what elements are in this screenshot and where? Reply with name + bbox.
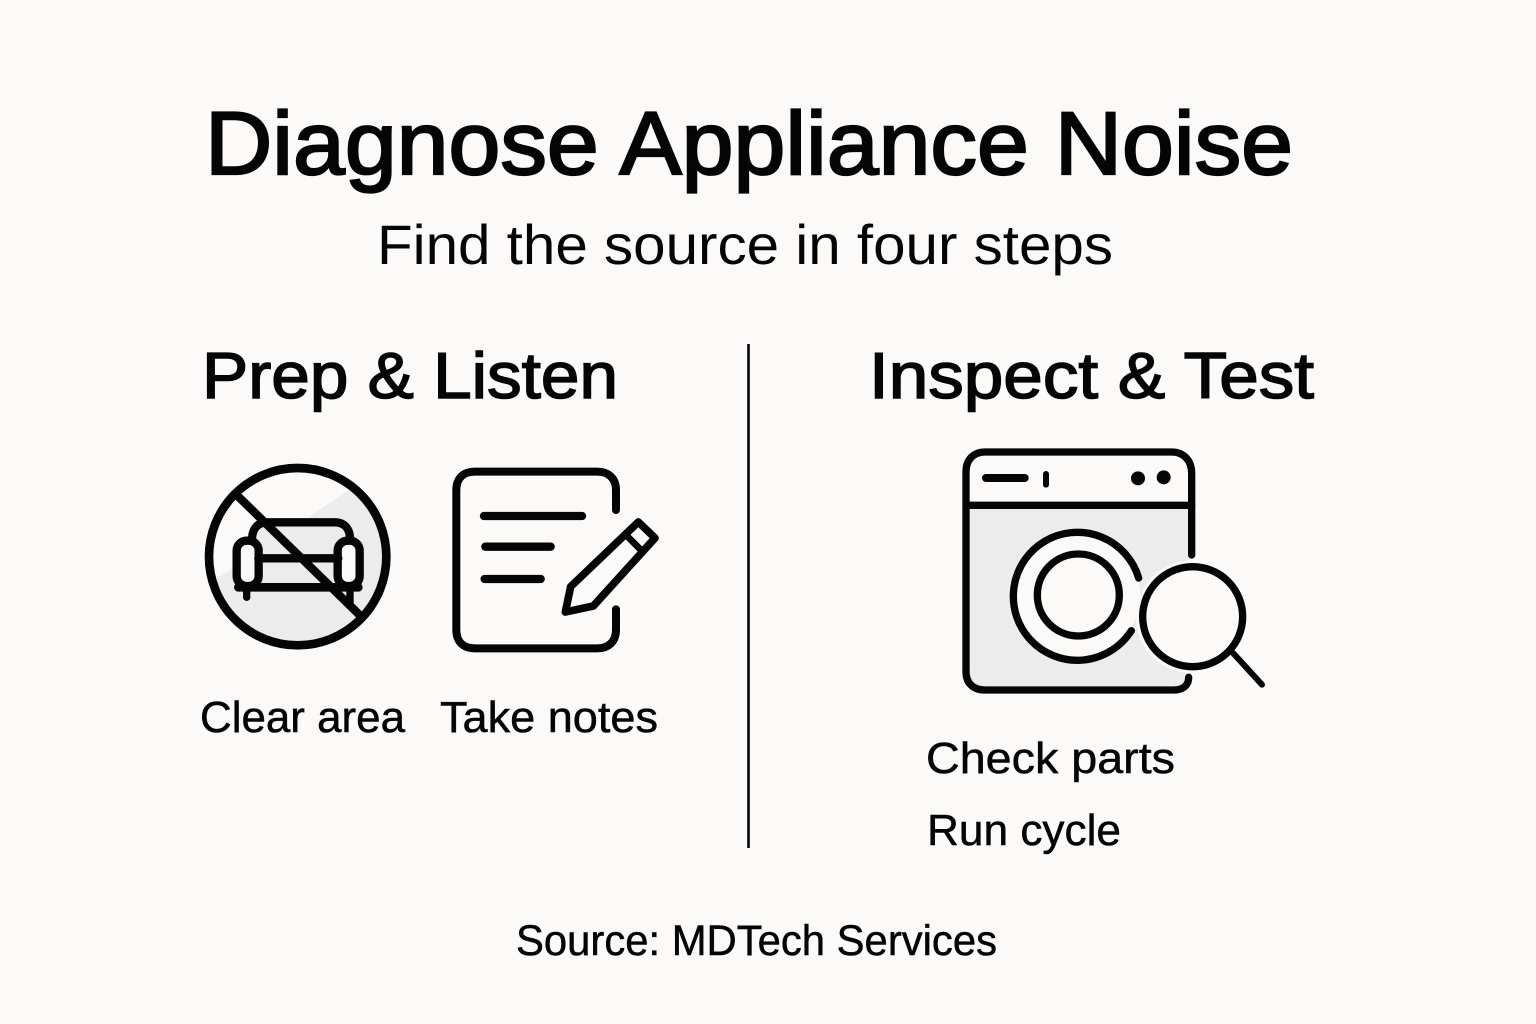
label: check parts: Check parts bbox=[926, 734, 1175, 783]
label: clear area: Clear area bbox=[200, 693, 406, 742]
icon: no sofa, clear area bbox=[209, 468, 397, 657]
source footer: Source: MDTech Services bbox=[516, 917, 997, 965]
icon: washing machine with magnifying glass bbox=[966, 452, 1262, 690]
heading: prep and listen: Prep & Listen bbox=[202, 339, 618, 412]
title: Diagnose Appliance Noise bbox=[205, 93, 1293, 193]
label: run cycle: Run cycle bbox=[927, 806, 1121, 855]
panel: prep and listen bbox=[200, 339, 658, 742]
center divider line bbox=[747, 344, 750, 848]
label: take notes: Take notes bbox=[440, 693, 658, 742]
subtitle: Find the source in four steps bbox=[377, 213, 1113, 276]
infographic canvas bbox=[202, 108, 1314, 956]
icon: notepad and pencil bbox=[456, 472, 655, 648]
heading: inspect and test: Inspect & Test bbox=[869, 339, 1314, 412]
panel: inspect and test bbox=[869, 339, 1314, 855]
